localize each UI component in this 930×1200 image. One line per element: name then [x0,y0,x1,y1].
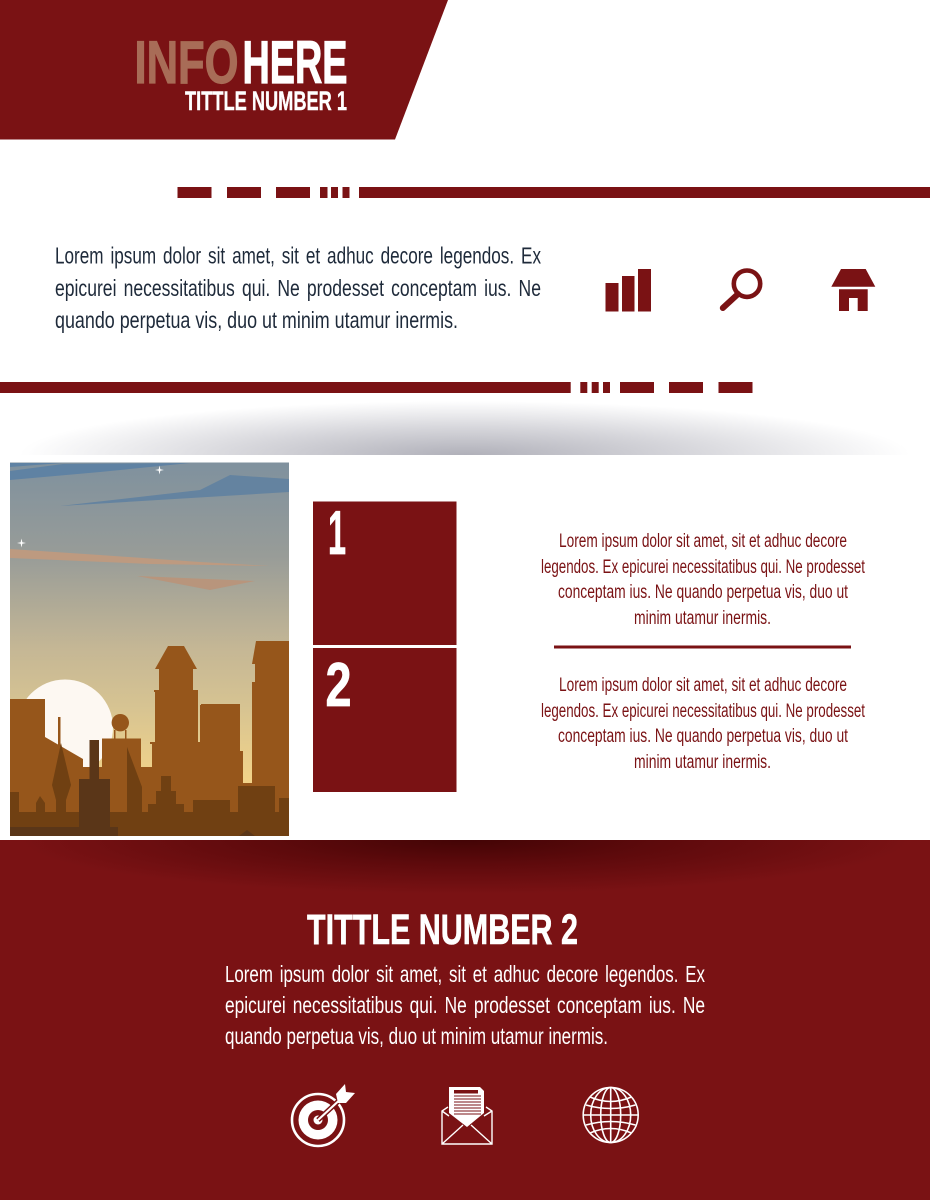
intro paragraph: epicurei necessitatibus qui. Ne prodesset conceptam ius. Ne [55,275,541,301]
logo title: INFO [134,29,238,96]
dark chimney [10,740,255,836]
text block 2 [541,675,865,773]
text block 1 [541,531,865,629]
footer paragraph: quando perpetua vis, duo ut minim utamur inermis. [225,1023,608,1049]
icon: envelope with letter [442,1087,492,1144]
logo title [134,29,348,96]
intro paragraph [55,242,541,333]
panel: city illustration [10,462,289,836]
panel: footer [0,840,930,1200]
panel: number box 2 [313,648,456,792]
logo title: HERE [242,29,348,96]
intro paragraph: Lorem ipsum dolor sit amet, sit et adhuc decore legendos. Ex [55,242,541,268]
icon: globe [583,1088,638,1142]
icon: bar chart [606,269,651,312]
icon: house [831,269,875,311]
top dashed rule [178,187,930,198]
footer heading: TITTLE NUMBER 2 [307,906,578,954]
panel: number box 2: 2 [326,651,352,720]
bottom dashed rule [0,382,752,393]
grey shadow [20,401,910,455]
intro paragraph: quando perpetua vis, duo ut minim utamur inermis. [55,307,458,333]
stars [17,466,164,548]
foreground buildings [10,743,289,836]
panel: number box 1 [313,499,456,645]
subtitle: TITTLE NUMBER 1 [185,86,347,116]
footer paragraph: Lorem ipsum dolor sit amet, sit et adhuc decore legendos. Ex [225,961,705,987]
header banner [0,0,448,140]
icon: magnifier [723,270,760,308]
skyline [10,641,289,836]
footer paragraph [225,961,705,1049]
panel: number box 1: 1 [328,499,346,568]
text block 2: minim utamur inermis. [634,752,771,773]
clouds [10,463,289,590]
text block 1: minim utamur inermis. [634,608,771,629]
sun [17,680,113,776]
footer paragraph: epicurei necessitatibus qui. Ne prodesset conceptam ius. Ne [225,992,705,1018]
icon: target [292,1084,355,1146]
